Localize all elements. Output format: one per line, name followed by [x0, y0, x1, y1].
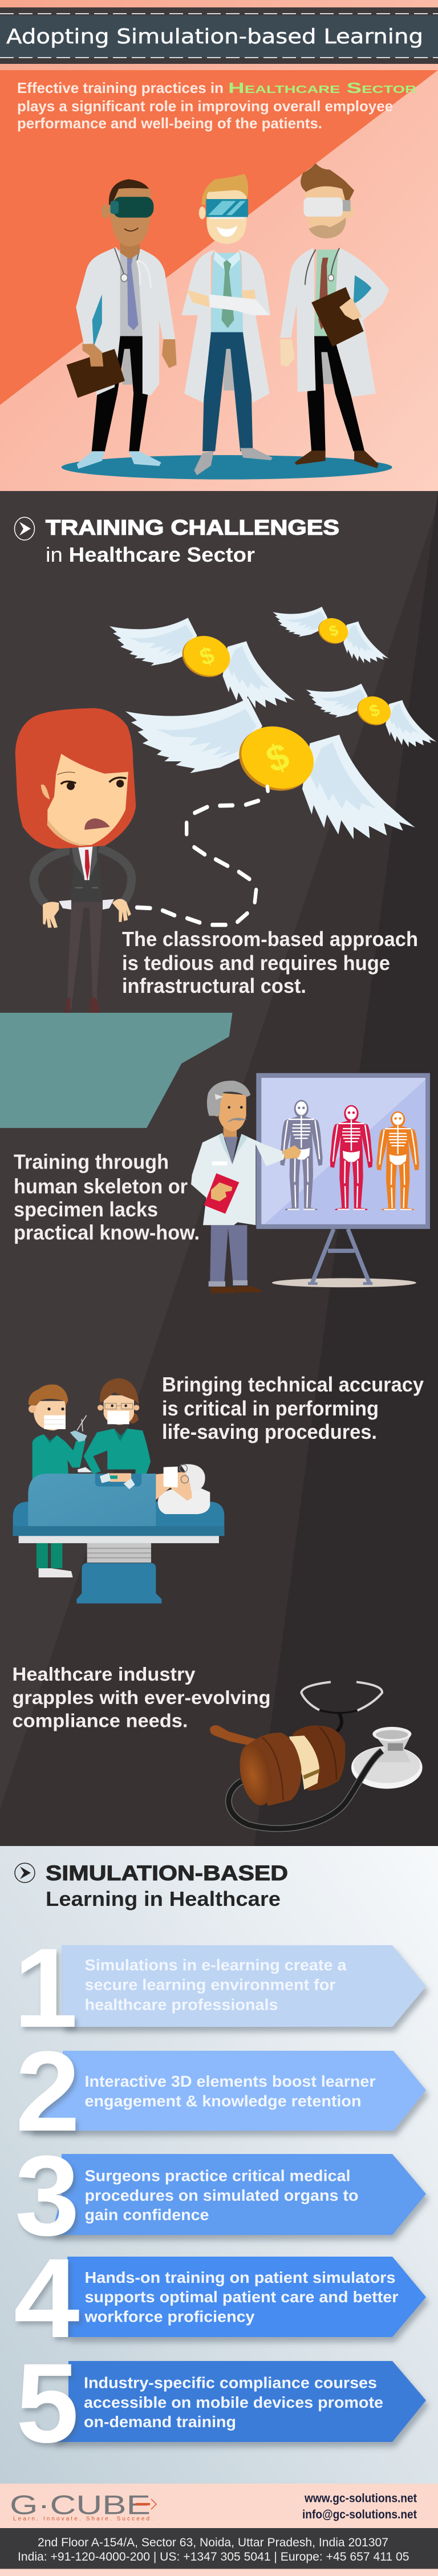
illustration: three doctors with VR headsets	[62, 163, 392, 480]
step 3: 3	[15, 2132, 79, 2259]
intro text: Effective training practices in	[17, 79, 224, 96]
flying coin small right: $	[367, 701, 382, 721]
text: technical accuracy	[162, 1373, 424, 1443]
step 4: workforce proficiency	[84, 2307, 255, 2326]
heading: training challenges: in Healthcare Sector	[46, 543, 255, 566]
surgeon legs	[36, 1543, 73, 1577]
intro text: Healthcare Sector	[228, 79, 416, 96]
patient head	[156, 1464, 210, 1514]
table column	[87, 1543, 151, 1563]
table rail	[19, 1536, 219, 1543]
professor figure	[191, 1081, 301, 1293]
orange diagonal background	[0, 70, 438, 405]
anatomy board on easel	[256, 1073, 430, 1287]
text: classroom approach: The classroom-based approach	[122, 927, 418, 951]
text: compliance needs: Healthcare industry	[13, 1664, 196, 1685]
text: classroom approach	[122, 927, 418, 997]
text: human skeleton	[14, 1150, 200, 1244]
surgical tray and gloved hands	[95, 1473, 141, 1489]
panel: training challenges background	[0, 491, 438, 1846]
step 4: 4	[14, 2236, 80, 2362]
flying coin small top: $	[327, 621, 340, 640]
address bar	[0, 2528, 438, 2569]
ground shadow	[62, 455, 392, 480]
step 3: Surgeons practice critical medical	[84, 2167, 350, 2184]
heading: Learning in Healthcare	[46, 1887, 281, 1910]
text: human skeleton: specimen lacks	[14, 1198, 158, 1221]
skeleton orange	[376, 1111, 419, 1210]
doctor 3	[280, 163, 389, 468]
text: classroom approach: is tedious and requires huge	[122, 951, 390, 975]
text: human skeleton: Training through	[14, 1150, 169, 1174]
step 4	[14, 2236, 426, 2362]
flying coin medium: $	[196, 641, 218, 671]
step 2	[15, 2027, 426, 2155]
flying coin medium	[110, 618, 295, 708]
step 5: 5	[16, 2340, 79, 2466]
dashed money trail	[137, 786, 268, 925]
step 4: supports optimal patient care and better	[84, 2288, 399, 2306]
skeleton gray	[280, 1100, 323, 1210]
step 2: 2	[15, 2027, 80, 2155]
address bar: India: +91-120-4000-200 | US: +1347 305 5041 | Europe: +45 657 411 05	[18, 2550, 409, 2563]
operating table mattress	[13, 1502, 224, 1536]
logo: Learn. Innovate. Share. Succeed.	[13, 2516, 153, 2522]
step 5: Industry-specific compliance courses	[84, 2374, 377, 2392]
title: Adopting Simulation-based Learning	[6, 25, 423, 48]
title banner	[0, 7, 438, 64]
contact links	[302, 2492, 417, 2521]
ear tubes	[301, 1682, 382, 1732]
jacket	[70, 845, 103, 902]
intro text: plays a significant role in improving overall employee	[17, 98, 393, 115]
icon: arrow circle dark	[15, 1863, 35, 1883]
teacher with skeleton board	[191, 1073, 430, 1293]
step 1: secure learning environment for	[84, 1975, 336, 1994]
patient blanket	[28, 1474, 156, 1526]
step 4: Hands-on training on patient simulators	[84, 2269, 396, 2286]
illustration: flying money	[110, 607, 436, 839]
doctor 2	[181, 174, 273, 475]
flying coin large	[125, 698, 415, 839]
illustration: gavel and stethoscope	[210, 1682, 423, 1828]
skeleton red	[330, 1105, 372, 1210]
doctor 1	[67, 179, 177, 469]
step 2: engagement & knowledge retention	[84, 2092, 362, 2110]
flying coin large: $	[261, 735, 294, 781]
text: technical accuracy: life-saving procedures.	[162, 1420, 377, 1443]
contact links: www.gc-solutions.net	[304, 2492, 417, 2505]
contact links: info@gc-solutions.net	[302, 2508, 417, 2521]
flying coin small right	[306, 684, 436, 747]
step 3: procedures on simulated organs to	[84, 2186, 358, 2204]
heading: training challenges: TRAINING CHALLENGES	[46, 516, 339, 539]
teal platform and heels	[0, 998, 233, 1128]
text: human skeleton: practical know-how.	[14, 1220, 200, 1244]
text: classroom approach: infrastructural cost.	[122, 974, 306, 997]
step 1: healthcare professionals	[84, 1996, 278, 2013]
logo	[10, 2490, 156, 2522]
intro text: performance and well-being of the patients.	[17, 115, 322, 132]
icon: arrow circle	[15, 517, 34, 540]
panel: simulation-based learning	[0, 1846, 438, 2484]
step 2: Interactive 3D elements boost learner	[84, 2072, 376, 2090]
surgeon 2	[84, 1378, 151, 1481]
step 1: Simulations in e-learning create a	[84, 1956, 347, 1974]
text: compliance needs: compliance needs.	[13, 1710, 188, 1731]
step 3	[15, 2132, 426, 2259]
face	[47, 754, 128, 845]
hands	[43, 899, 131, 928]
gavel	[210, 1725, 346, 1808]
text: compliance needs: grapples with ever-evolving	[13, 1687, 270, 1708]
address bar: 2nd Floor A-154/A, Sector 63, Noida, Uttar Pradesh, India 201307	[38, 2536, 388, 2549]
pockets	[59, 899, 114, 910]
step 3: gain confidence	[84, 2206, 209, 2224]
footer: contact band	[0, 2484, 438, 2576]
heading	[15, 1861, 288, 1910]
illustration: surgeons and patient	[13, 1378, 224, 1604]
step 5: on-demand training	[84, 2413, 236, 2431]
rubber tube	[229, 1751, 382, 1828]
heading: training challenges	[15, 516, 339, 566]
text: technical accuracy: Bringing technical accuracy	[162, 1373, 424, 1396]
table base	[76, 1563, 161, 1604]
panel: header and intro	[0, 0, 438, 491]
flying coin small top	[273, 607, 388, 663]
logo: G·CUBE	[10, 2490, 151, 2520]
heading: SIMULATION-BASED	[46, 1861, 288, 1885]
text: technical accuracy: is critical in performing	[162, 1397, 379, 1420]
trousers	[67, 902, 103, 1009]
illustration: woman with empty pockets	[15, 708, 136, 1009]
step 5: accessible on mobile devices promote	[84, 2394, 383, 2411]
text: compliance needs	[13, 1664, 270, 1731]
chest piece	[351, 1727, 423, 1789]
hair	[15, 708, 136, 849]
intro text	[17, 79, 416, 132]
arms	[34, 848, 132, 904]
surgeon 1	[29, 1385, 92, 1481]
step 5	[16, 2340, 426, 2466]
text: human skeleton: human skeleton or	[14, 1175, 188, 1198]
step 1	[14, 1925, 426, 2051]
step 1: 1	[14, 1925, 78, 2051]
